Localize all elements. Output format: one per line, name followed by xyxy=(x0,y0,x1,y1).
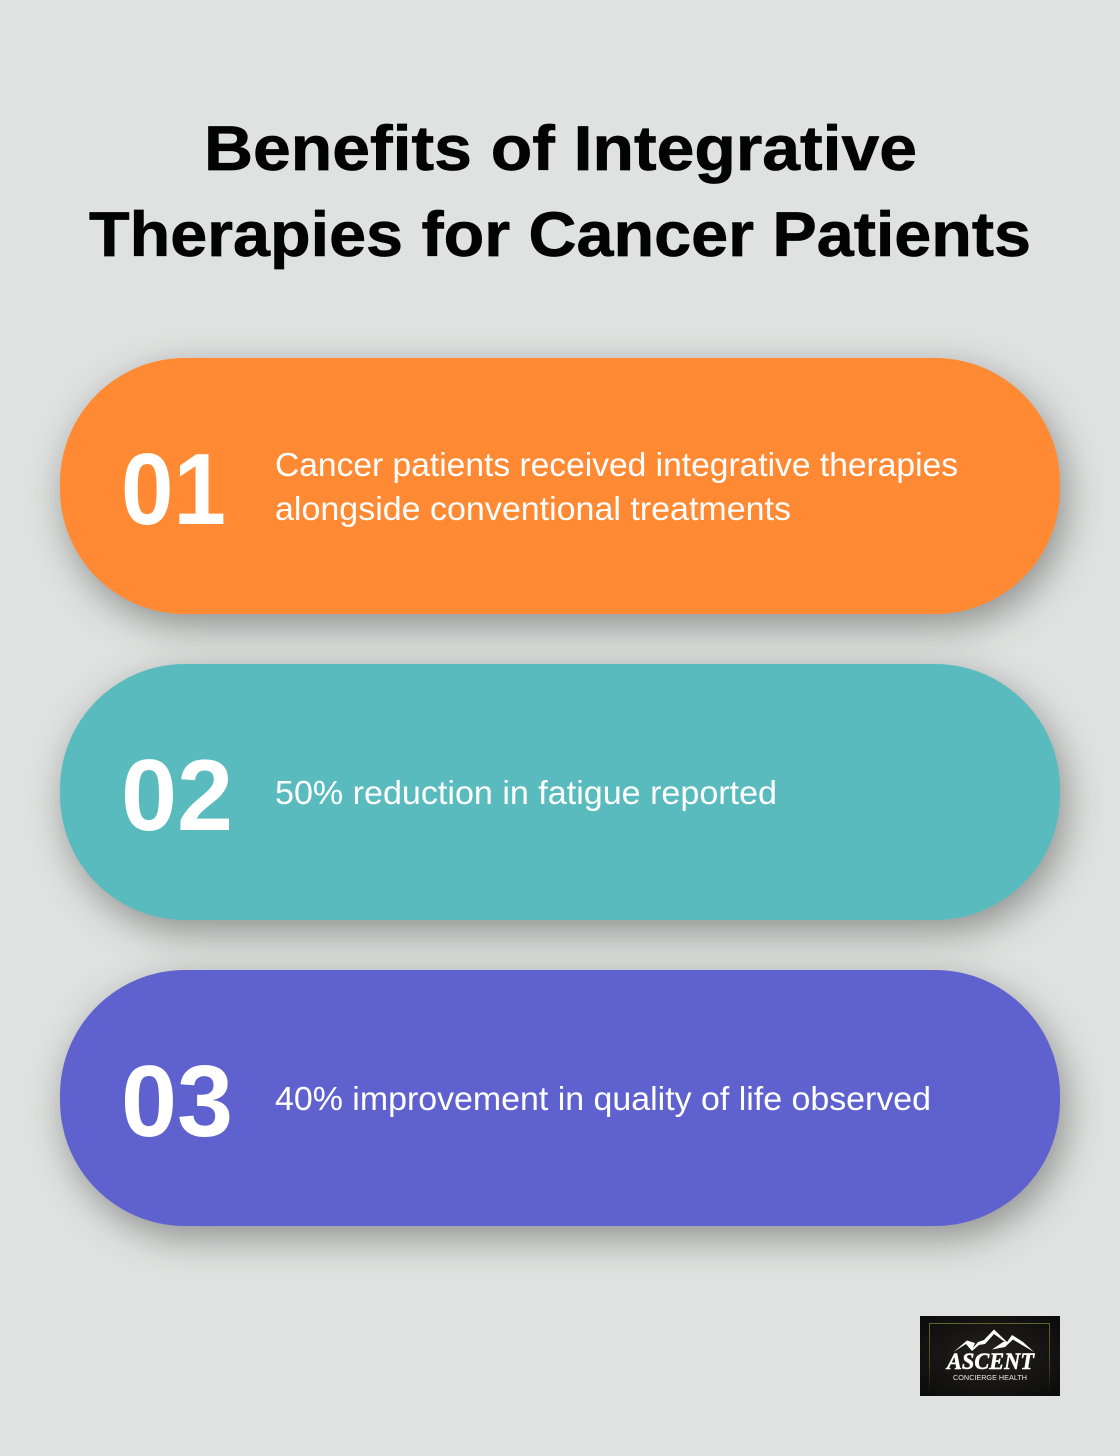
logo: Ascent Concierge Health xyxy=(920,1316,1060,1396)
logo wordmark: ASCENT xyxy=(945,1349,1035,1374)
text: step 03 description: 40% improvement in quality of life observed xyxy=(275,1080,931,1117)
title: Therapies for Cancer Patients xyxy=(89,200,1031,270)
number 01: 01 xyxy=(121,434,226,546)
text: step 01 description: alongside conventional treatments xyxy=(275,490,791,527)
panel: step 02 xyxy=(60,664,1066,932)
text: step 01 description: Cancer patients received integrative therapies xyxy=(275,446,958,483)
title xyxy=(89,114,1031,270)
text: step 01 description xyxy=(275,446,958,527)
panel: step 01 xyxy=(60,358,1066,626)
panel: step 03 xyxy=(60,970,1066,1238)
number 02: 02 xyxy=(121,740,233,852)
text: step 02 description: 50% reduction in fatigue reported xyxy=(275,774,777,811)
title: Benefits of Integrative xyxy=(204,114,917,184)
icon: mountains xyxy=(954,1330,1034,1352)
number 03: 03 xyxy=(121,1046,233,1158)
logo tagline: CONCIERGE HEALTH xyxy=(953,1373,1027,1382)
